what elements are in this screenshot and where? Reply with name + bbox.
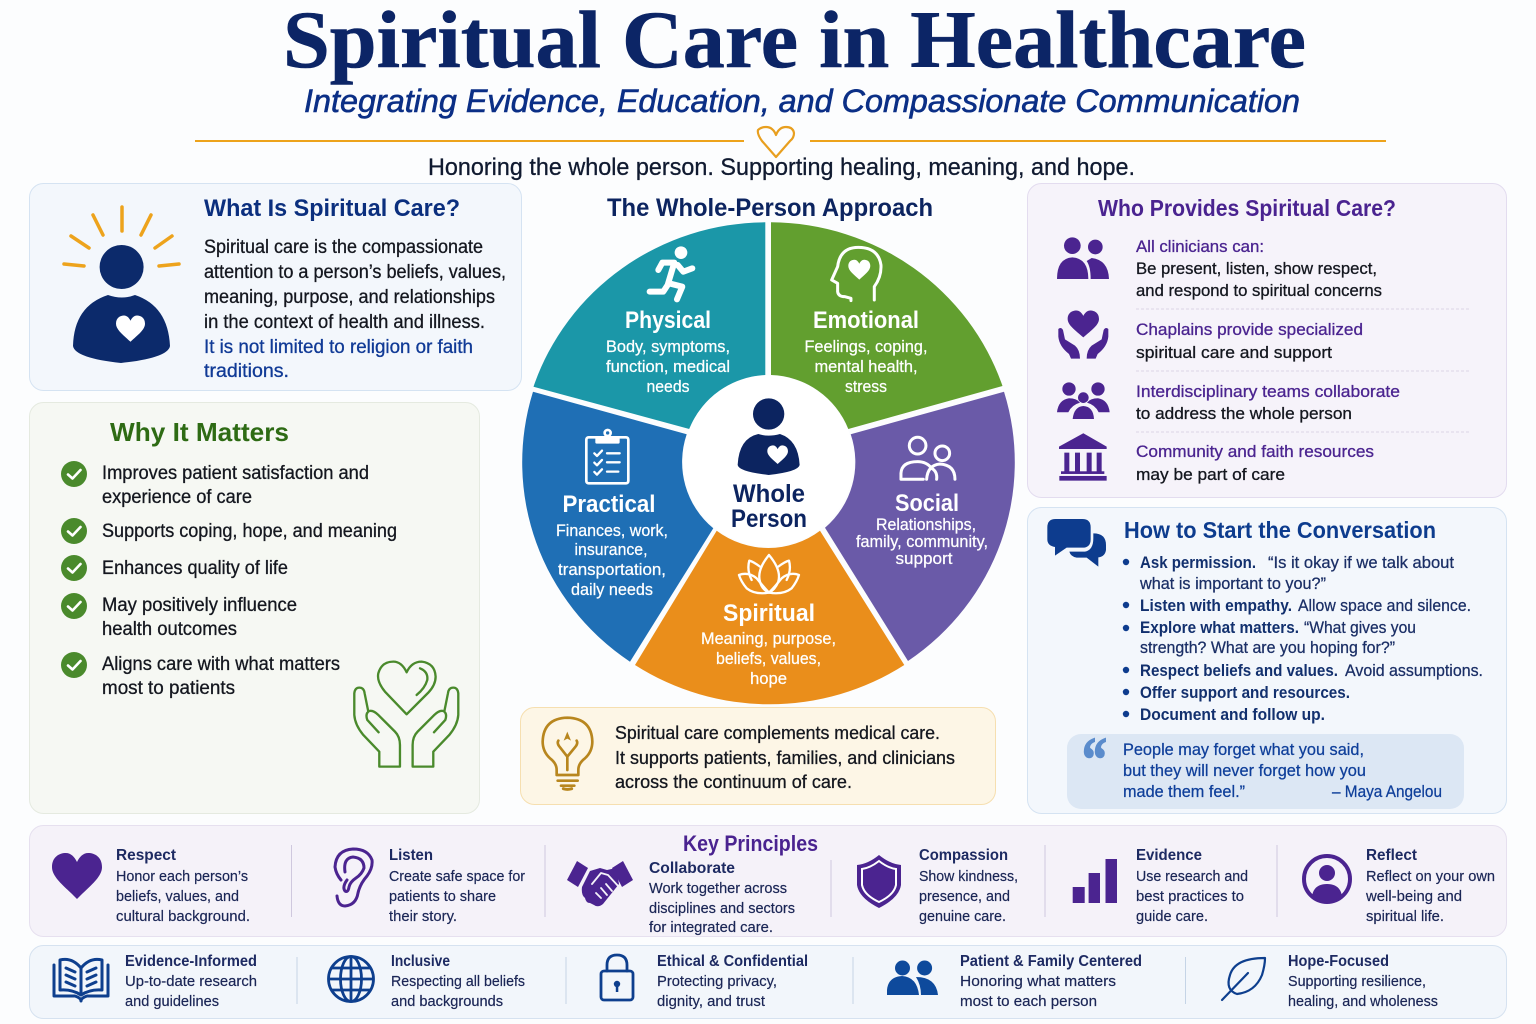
quality: ethical and confidential: dignity, and trust (657, 993, 766, 1010)
principle: compassion (857, 847, 1018, 925)
definition text: attention to a person’s beliefs, values, (204, 262, 506, 283)
conversation list: Listen with empathy. (1140, 597, 1292, 615)
icon: head with heart (832, 247, 881, 301)
segment: practical: Finances, work, (556, 521, 668, 540)
conversation list: “What gives you (1304, 619, 1416, 637)
segment: physical: needs (646, 377, 690, 396)
quality: hope-focused: Hope-Focused (1288, 953, 1389, 970)
icon: chaplains hands and heart (1058, 311, 1108, 359)
principle: reflect: spiritual life. (1366, 908, 1444, 925)
principle: respect: Respect (116, 847, 177, 864)
text: teams: to address the whole person (1136, 404, 1352, 423)
segment: physical: function, medical (606, 357, 730, 376)
list of benefits: Improves patient satisfaction and (102, 463, 369, 484)
text: teams: Interdisciplinary teams collaborate (1136, 382, 1400, 401)
segment: social: Relationships, (876, 515, 976, 534)
segment: practical: insurance, (574, 540, 648, 559)
conversation list: strength? What are you hoping for?” (1140, 639, 1395, 657)
conversation list: Document and follow up. (1140, 706, 1325, 724)
heading: How to Start the Conversation (1124, 517, 1436, 543)
text: clinicians: Be present, listen, show respect, (1136, 259, 1377, 278)
quality: evidence-informed: Up-to-date research (125, 973, 257, 990)
quality: patient and family centered: most to each person (960, 993, 1097, 1010)
segment: spiritual: hope (750, 669, 787, 688)
text: community: may be part of care (1136, 465, 1285, 484)
check icons (61, 461, 87, 678)
segment: practical: Practical (562, 491, 656, 518)
segment: spiritual (635, 531, 904, 704)
segment: physical: Body, symptoms, (606, 337, 730, 356)
principle: reflect: well-being and (1365, 888, 1462, 905)
conversation list: Allow space and silence. (1298, 597, 1471, 615)
icon: clinicians (1057, 237, 1109, 279)
list of benefits: health outcomes (102, 619, 237, 640)
icon: team (1057, 382, 1110, 419)
icon: runner (650, 246, 692, 299)
definition text: It is not limited to religion or faith (204, 337, 473, 358)
text: clinicians: All clinicians can: (1136, 237, 1264, 256)
panel: why it matters (30, 402, 480, 814)
text: chaplains: spiritual care and support (1136, 343, 1332, 362)
quality: ethical and confidential: Ethical & Confidential (657, 953, 808, 970)
text: chaplains: Chaplains provide specialized (1136, 320, 1363, 339)
icon: two people outline (901, 437, 955, 479)
heading: whole-person approach: The Whole-Person Approach (607, 194, 933, 222)
segment: practical: daily needs (571, 580, 653, 599)
segment: emotional: Feelings, coping, (804, 337, 928, 356)
principle: respect (52, 847, 250, 925)
segment: physical: Physical (625, 307, 711, 334)
principle: collaborate: Collaborate (649, 860, 735, 877)
definition text: traditions. (204, 361, 289, 382)
list of benefits: Supports coping, hope, and meaning (102, 521, 397, 542)
segment: emotional: stress (845, 377, 887, 396)
list of benefits: May positively influence (102, 595, 297, 616)
principle: collaborate: Work together across (649, 880, 787, 897)
icon: lotus (739, 555, 799, 593)
center hub: whole person: Whole (733, 480, 805, 508)
principle: collaborate: disciplines and sectors (649, 900, 795, 917)
principle: listen: their story. (389, 908, 457, 925)
segment: spiritual: Meaning, purpose, (701, 629, 836, 648)
principle: evidence: guide care. (1136, 908, 1208, 925)
quality: inclusive (328, 953, 525, 1010)
quality: hope-focused: healing, and wholeness (1288, 993, 1438, 1010)
icon: speech bubbles (1047, 519, 1106, 567)
conversation list: Avoid assumptions. (1345, 662, 1483, 680)
quote box: but they will never forget how you (1123, 762, 1366, 780)
conversation list: Respect beliefs and values. (1140, 662, 1338, 680)
quality: patient and family centered: Honoring what matters (960, 973, 1116, 990)
heading: Who Provides Spiritual Care? (1098, 195, 1396, 221)
header divider with heart (195, 127, 1386, 157)
principle: listen: Create safe space for (389, 868, 525, 885)
center hub: whole person: Person (731, 505, 807, 533)
icon: person with heart (738, 398, 800, 475)
principle: reflect: Reflect on your own (1366, 868, 1495, 885)
principle: listen: patients to share (389, 888, 496, 905)
principle: compassion: Compassion (919, 847, 1008, 864)
heading: What Is Spiritual Care? (204, 195, 460, 222)
definition text: Spiritual care is the compassionate (204, 237, 483, 258)
center hub: whole person (683, 376, 854, 546)
segment: social: family, community, (856, 532, 988, 551)
quote box: – Maya Angelou (1332, 783, 1442, 801)
quote box: made them feel.” (1123, 783, 1245, 801)
conversation list: Ask permission. (1140, 554, 1256, 572)
panel: care qualities strip (30, 946, 1506, 1018)
list of benefits: experience of care (102, 487, 252, 508)
quality: inclusive: Respecting all beliefs (391, 973, 525, 990)
segment: emotional: mental health, (814, 357, 918, 376)
callout: complements medical care: across the continuum of care. (615, 771, 852, 792)
quality: evidence-informed (54, 953, 257, 1010)
principle: evidence: Evidence (1136, 847, 1202, 864)
definition text: in the context of health and illness. (204, 312, 485, 333)
conversation list: what is important to you?” (1139, 575, 1326, 593)
definition text: meaning, purpose, and relationships (204, 287, 495, 308)
segment: emotional (771, 222, 1002, 429)
principle: evidence: best practices to (1136, 888, 1244, 905)
principle: collaborate (567, 860, 795, 936)
panel: key principles (30, 826, 1506, 936)
principle: compassion: presence, and (919, 888, 1010, 905)
principle: evidence (1073, 847, 1248, 925)
principle: respect: cultural background. (116, 908, 250, 925)
conversation list: “Is it okay if we talk about (1268, 554, 1454, 572)
principle: evidence: Use research and (1136, 868, 1248, 885)
heading: Key Principles (683, 831, 818, 856)
icon: clipboard checklist (586, 430, 628, 483)
icon: light bulb (543, 718, 592, 789)
segment: emotional: Emotional (813, 307, 919, 334)
quality: inclusive: and backgrounds (391, 993, 503, 1010)
text: teams (1136, 382, 1400, 423)
quote box (1067, 726, 1464, 809)
heading: Why It Matters (110, 417, 289, 447)
tagline: Honoring the whole person. Supporting healing, meaning, and hope. (428, 154, 1135, 181)
principle: respect: Honor each person’s (116, 868, 248, 885)
chart: whole-person wheel (522, 222, 1015, 704)
segment: social (825, 392, 1015, 661)
principle: compassion: Show kindness, (919, 868, 1018, 885)
text: community: Community and faith resources (1136, 442, 1374, 461)
callout: complements medical care (520, 708, 996, 804)
segment: practical: transportation, (558, 560, 666, 579)
quality: ethical and confidential: Protecting privacy, (657, 973, 777, 990)
text: chaplains (1136, 320, 1363, 362)
quality: hope-focused (1222, 953, 1438, 1010)
quality: patient and family centered: Patient & Family Centered (960, 953, 1142, 970)
quality: ethical and confidential (601, 953, 808, 1010)
segment: spiritual: beliefs, values, (716, 649, 821, 668)
segment: social: support (896, 549, 953, 568)
panel: what is spiritual care (30, 184, 522, 390)
segment: practical (522, 392, 713, 662)
quality: patient and family centered (887, 953, 1142, 1010)
callout: complements medical care: Spiritual care complements medical care. (615, 722, 940, 743)
principle: respect: beliefs, values, and (116, 888, 239, 905)
list of benefits: Enhances quality of life (102, 558, 288, 579)
panel: who provides spiritual care (1028, 184, 1506, 498)
segment: physical (534, 222, 765, 429)
subtitle: Integrating Evidence, Education, and Compassionate Communication (304, 83, 1300, 119)
conversation list: Explore what matters. (1140, 619, 1299, 637)
quality: inclusive: Inclusive (391, 953, 450, 970)
list of benefits: Aligns care with what matters (102, 654, 340, 675)
quality: hope-focused: Supporting resilience, (1288, 973, 1426, 990)
quality: evidence-informed: Evidence-Informed (125, 953, 257, 970)
principle: collaborate: for integrated care. (649, 919, 773, 936)
callout: complements medical care: It supports patients, families, and clinicians (615, 747, 955, 768)
icon: quotation mark: “ (1082, 726, 1107, 794)
icon: person with heart and rays (64, 207, 179, 363)
segment: spiritual: Spiritual (723, 600, 815, 627)
principle: listen (335, 847, 525, 925)
principle: listen: Listen (389, 847, 433, 864)
conversation list: Offer support and resources. (1140, 684, 1350, 702)
quote box: People may forget what you said, (1123, 741, 1364, 759)
text: community (1136, 442, 1374, 484)
list of benefits (102, 463, 397, 699)
text: clinicians: and respond to spiritual concerns (1136, 281, 1382, 300)
segment: social: Social (895, 490, 959, 517)
definition text (204, 237, 506, 382)
panel: how to start the conversation (1028, 508, 1506, 814)
principle: reflect: Reflect (1366, 847, 1418, 864)
icon: building with columns (1059, 433, 1107, 481)
text: clinicians (1136, 237, 1382, 300)
principle: reflect (1304, 847, 1495, 925)
quality: evidence-informed: and guidelines (125, 993, 219, 1010)
conversation list (1123, 554, 1483, 724)
list of benefits: most to patients (102, 678, 235, 699)
principle: compassion: genuine care. (919, 908, 1006, 925)
icon: hands holding heart (354, 662, 458, 767)
